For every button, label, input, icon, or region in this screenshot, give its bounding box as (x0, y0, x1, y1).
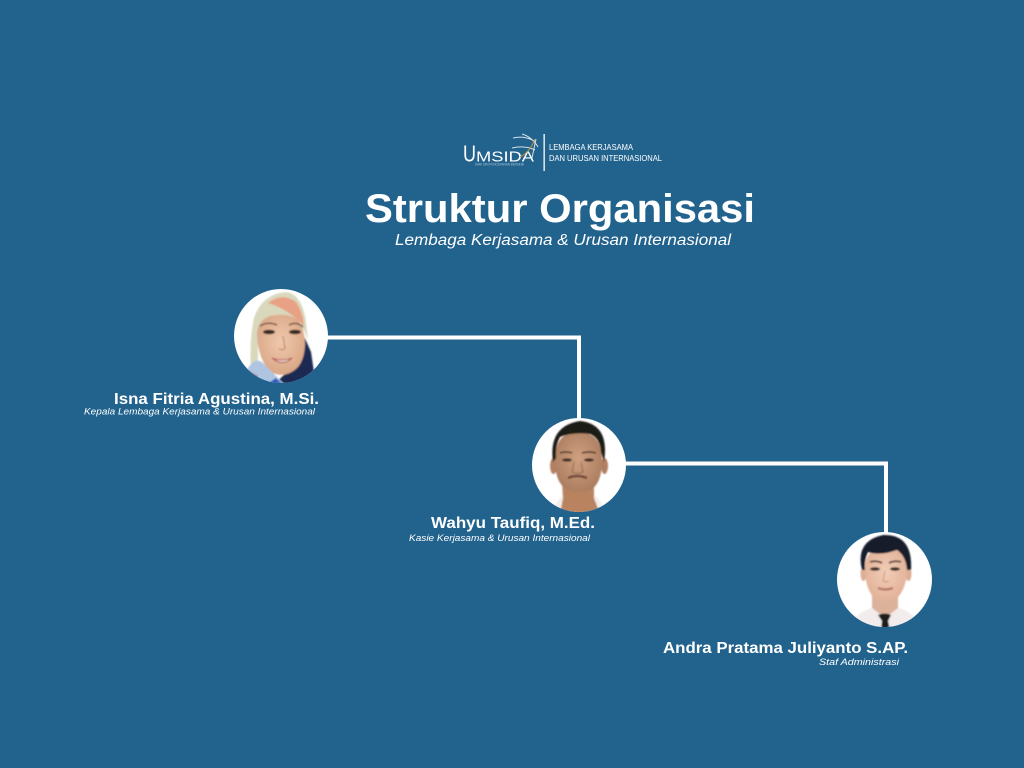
logo: Umsida lembaga kerjasama: DARI SINI PENCERAHAN BERSEMI (475, 162, 524, 166)
name: Wahyu Taufiq: Wahyu Taufiq, M.Ed. (431, 515, 595, 532)
logo: Umsida lembaga kerjasama: DAN URUSAN INTERNASIONAL (549, 154, 663, 163)
name: Andra Pratama Juliyanto: Andra Pratama Juliyanto S.AP. (663, 640, 908, 657)
connector: head to section chief (326, 338, 579, 420)
logo: Umsida lembaga kerjasama: U (463, 140, 476, 166)
portrait: Andra Pratama Juliyanto (837, 532, 932, 632)
logo: Umsida lembaga kerjasama: LEMBAGA KERJASAMA (549, 143, 634, 152)
title: Struktur Organisasi (365, 187, 755, 231)
connector: section chief to admin staff (624, 464, 886, 534)
role: Kasie: Kasie Kerjasama & Urusan Internasional (409, 533, 591, 543)
subtitle: Lembaga Kerjasama & Urusan Internasional (395, 232, 732, 249)
name: Isna Fitria Agustina: Isna Fitria Agustina, M.Si. (114, 391, 319, 408)
role: Kepala Lembaga: Kepala Lembaga Kerjasama & Urusan Internasional (84, 406, 316, 416)
role: Staf Administrasi: Staf Administrasi (819, 657, 900, 667)
logo: Umsida lembaga kerjasama (463, 134, 663, 171)
logo: Umsida lembaga kerjasama: MSIDA (476, 150, 534, 166)
portrait: Isna Fitria Agustina (234, 289, 328, 388)
portrait: Wahyu Taufiq (532, 418, 626, 514)
